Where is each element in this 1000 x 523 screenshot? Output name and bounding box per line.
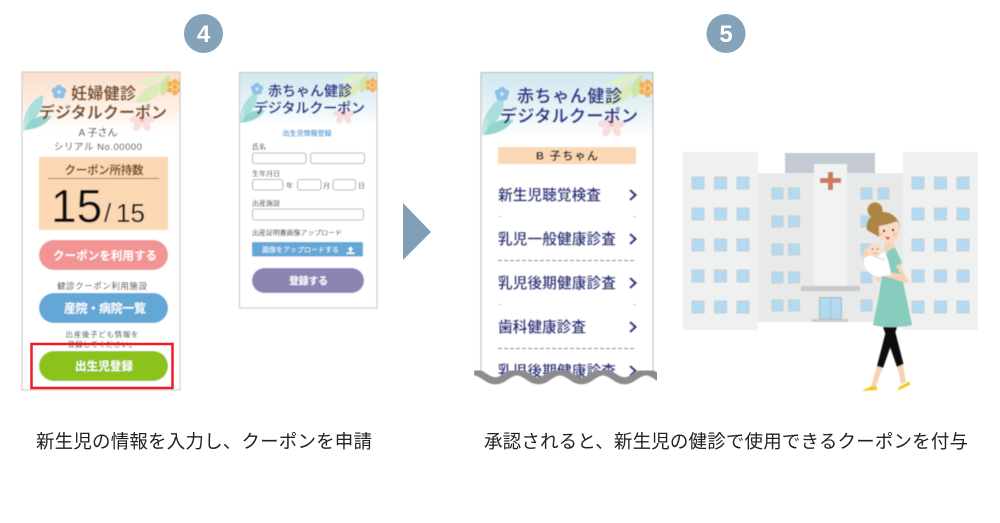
baby bbox=[864, 243, 891, 277]
phone screen: baby coupon list bbox=[481, 72, 656, 380]
item: hearing test: 新生児聴覚検査 bbox=[498, 186, 601, 204]
header title: デジタルクーポン bbox=[254, 100, 365, 116]
note text: 登録してください。 bbox=[68, 339, 136, 349]
upload button: 画像をアップロードする bbox=[262, 245, 339, 254]
coupon count box: / bbox=[104, 198, 112, 228]
step badge 4: 4 bbox=[197, 21, 211, 48]
name field: 氏名 bbox=[252, 142, 266, 151]
item: late infant checkup: 乳児後期健康診査 bbox=[498, 274, 616, 292]
coupon count box: 15 bbox=[116, 198, 145, 228]
upload button bbox=[252, 242, 363, 256]
icon: hospital cross bbox=[820, 172, 841, 190]
item: hearing test bbox=[498, 186, 636, 204]
header title bbox=[254, 83, 365, 116]
birth date field: 月 bbox=[323, 182, 330, 190]
calves and feet bbox=[871, 365, 883, 387]
leggings bbox=[877, 327, 897, 368]
birth date field: 年 bbox=[286, 181, 293, 190]
form heading: 出生児情報登録 bbox=[282, 128, 332, 138]
checkup list bbox=[498, 186, 636, 380]
item: infant general checkup: 乳児一般健康診査 bbox=[498, 230, 616, 248]
arrow bbox=[403, 203, 431, 260]
windows bbox=[692, 177, 969, 313]
user info: シリアル No.00000 bbox=[54, 142, 142, 153]
header title: 赤ちゃん健診 bbox=[517, 87, 622, 106]
button: newborn registration: 出生児登録 bbox=[75, 359, 134, 373]
certificate upload label: 出産証明書画像アップロード bbox=[252, 228, 342, 237]
register button: 登録する bbox=[289, 274, 328, 288]
caption: step 4: 新生児の情報を入力し、クーポンを申請 bbox=[36, 431, 372, 452]
user info: A 子さん bbox=[79, 127, 117, 139]
item: dental checkup bbox=[498, 318, 636, 336]
user info bbox=[54, 127, 142, 153]
register button bbox=[252, 268, 364, 293]
birth date field: 日 bbox=[358, 182, 365, 190]
phone screen: maternity coupon bbox=[22, 72, 183, 390]
child name bar: B 子ちゃん bbox=[536, 150, 598, 162]
birth date field: 生年月日 bbox=[252, 169, 280, 178]
coupon count box: 15 bbox=[51, 180, 102, 232]
item: dental checkup: 歯科健康診査 bbox=[498, 318, 586, 336]
torn edge wave bbox=[474, 370, 657, 385]
illustration: hospital building bbox=[683, 152, 978, 330]
red highlight frame bbox=[32, 344, 172, 388]
child name bar bbox=[498, 147, 636, 164]
entrance door bbox=[812, 298, 848, 322]
facility field bbox=[252, 198, 364, 220]
coupon count box bbox=[39, 157, 168, 232]
button: newborn registration bbox=[39, 351, 168, 381]
note text bbox=[66, 329, 138, 349]
step badge 5: 5 bbox=[719, 21, 733, 48]
birth date field bbox=[252, 169, 365, 190]
header title: デジタルクーポン bbox=[500, 106, 638, 126]
facility label: 健診クーポン利用施設 bbox=[57, 281, 147, 291]
caption: step 5: 承認されると、新生児の健診で使用できるクーポンを付与 bbox=[484, 431, 968, 452]
near arm bbox=[881, 264, 909, 283]
note text: 出産後子ども情報を bbox=[66, 329, 138, 339]
facility field: 出産施設 bbox=[252, 198, 280, 208]
item: late infant checkup cut off bbox=[498, 362, 638, 378]
phone screen: newborn registration form bbox=[240, 72, 379, 308]
button: use coupon: クーポンを利用する bbox=[53, 248, 157, 262]
far arm bbox=[863, 248, 882, 283]
header title bbox=[39, 85, 167, 122]
item: late infant checkup cut off: 乳児後期健康診査 bbox=[498, 362, 616, 380]
dress bbox=[873, 248, 912, 327]
button: use coupon bbox=[39, 240, 168, 270]
header title: 妊婦健診 bbox=[71, 85, 136, 103]
step badge 4 bbox=[184, 14, 223, 53]
header title: デジタルクーポン bbox=[39, 103, 167, 122]
button: hospital list bbox=[39, 293, 168, 323]
header title: 赤ちゃん健診 bbox=[268, 83, 352, 99]
neck bbox=[884, 240, 895, 256]
head and hair bbox=[867, 202, 900, 243]
step badge 5 bbox=[706, 14, 746, 53]
name field bbox=[252, 142, 364, 164]
header title bbox=[500, 87, 638, 126]
button: hospital list: 産院・病院一覧 bbox=[64, 300, 146, 316]
coupon count box: クーポン所持数 bbox=[64, 163, 144, 177]
illustration: mother holding baby bbox=[862, 202, 912, 391]
